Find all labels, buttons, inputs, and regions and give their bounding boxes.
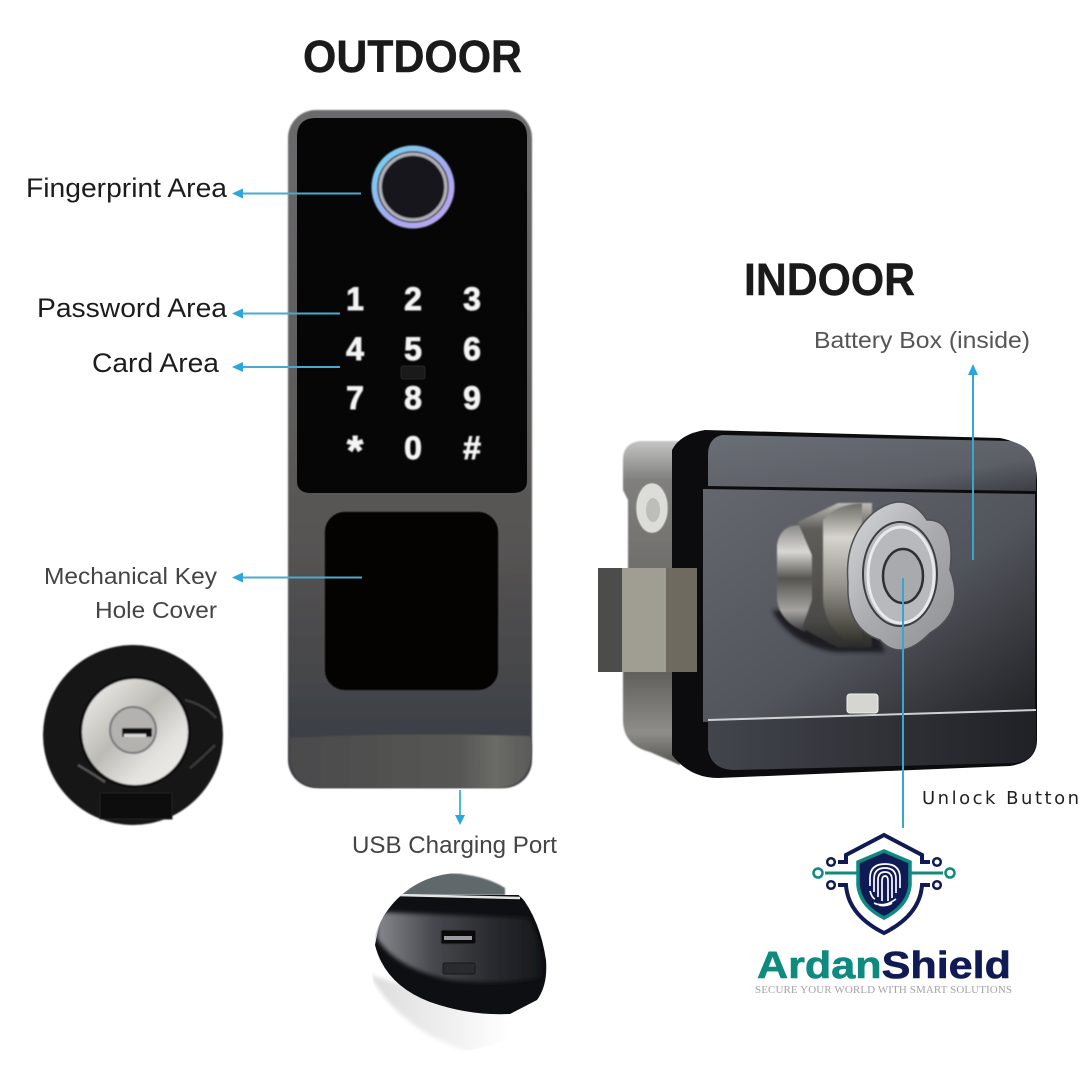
black frame bbox=[672, 430, 1037, 778]
indicator window bbox=[847, 694, 878, 713]
side housing bbox=[623, 441, 680, 765]
keypad digits: 0 bbox=[404, 430, 422, 466]
callout: unlock button: Unlock Button bbox=[922, 788, 1079, 809]
keypad digits: 8 bbox=[404, 380, 422, 416]
panel: black keypad face bbox=[297, 118, 527, 493]
icon: fingerprint sensor ring bbox=[374, 148, 452, 226]
keypad digits bbox=[346, 281, 481, 474]
icon: key cylinder photo bbox=[43, 645, 223, 825]
keypad digits: 5 bbox=[404, 331, 422, 367]
callout: mechanical key hole cover: Mechanical Key bbox=[44, 563, 218, 589]
keypad digits: 6 bbox=[463, 331, 481, 367]
main front plate bbox=[703, 489, 1035, 722]
black casing bbox=[375, 895, 546, 1014]
callout: password area: Password Area bbox=[37, 293, 227, 323]
callout: fingerprint area: Fingerprint Area bbox=[26, 173, 227, 203]
keypad digits: * bbox=[347, 427, 364, 474]
keypad digits: 4 bbox=[346, 331, 364, 367]
icon: fingerprint bbox=[870, 864, 900, 906]
knob assembly bbox=[772, 502, 955, 652]
callout: card area bbox=[92, 348, 340, 378]
heading: indoor: INDOOR bbox=[744, 254, 915, 305]
top battery cover band bbox=[708, 435, 1036, 491]
keypad digits: 3 bbox=[463, 281, 481, 317]
keypad digits: 7 bbox=[346, 380, 364, 416]
callout: password area bbox=[37, 293, 340, 323]
keypad digits: 1 bbox=[346, 281, 364, 317]
outdoor lock body bbox=[288, 110, 532, 788]
panel: mechanical key hole cover bbox=[325, 512, 498, 690]
keypad digits: # bbox=[463, 430, 481, 466]
callout: mechanical key hole cover: Hole Cover bbox=[95, 597, 217, 623]
wordmark: Ardan Shield bbox=[757, 945, 1011, 987]
keypad digits: 2 bbox=[404, 281, 422, 317]
callout: battery box bbox=[814, 327, 1030, 560]
callout: fingerprint area bbox=[26, 173, 361, 203]
sliding latch bolt bbox=[598, 568, 697, 672]
callout: battery box: Battery Box (inside) bbox=[814, 327, 1030, 353]
card sensor mark bbox=[401, 366, 425, 379]
indoor lock bbox=[598, 430, 1037, 778]
icon: shield and circuit bbox=[814, 835, 954, 933]
logo: ArdanShield bbox=[755, 835, 1012, 996]
keypad digits: 9 bbox=[463, 380, 481, 416]
tagline: SECURE YOUR WORLD WITH SMART SOLUTIONS bbox=[755, 984, 1012, 996]
cap wedge bbox=[400, 873, 505, 895]
bottom foot section bbox=[289, 734, 532, 788]
lower band bbox=[708, 711, 1036, 770]
usb ports bbox=[441, 930, 476, 944]
callout: card area: Card Area bbox=[92, 348, 219, 378]
callout: usb charging port bbox=[352, 790, 557, 859]
callout: mechanical key hole cover bbox=[44, 563, 362, 623]
icon: usb port photo bbox=[370, 873, 546, 1052]
heading: outdoor: OUTDOOR bbox=[303, 31, 522, 82]
callout: usb charging port: USB Charging Port bbox=[352, 832, 557, 859]
housing screw hole bbox=[636, 483, 668, 533]
